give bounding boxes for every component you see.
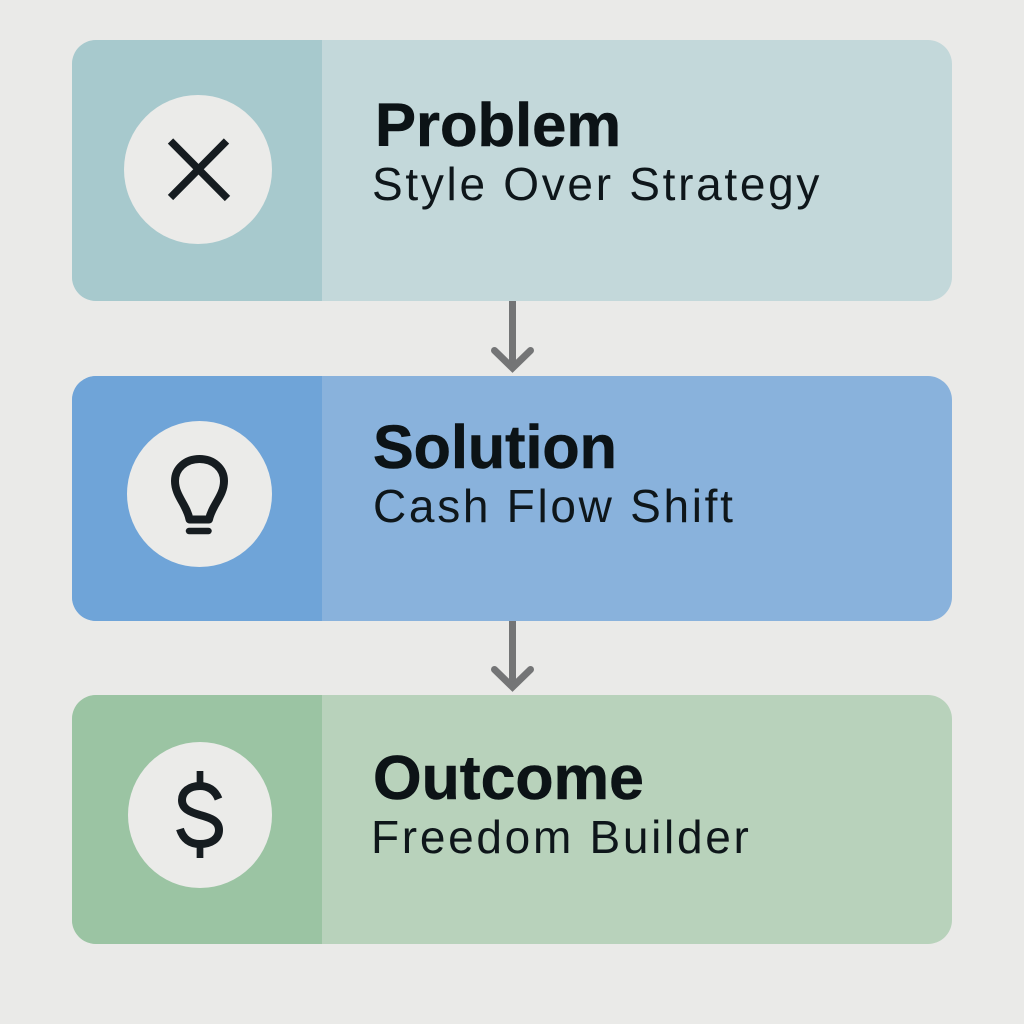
heading: solution: Solution [373,413,617,481]
text: outcome subtitle: Freedom Builder [371,811,752,863]
arrow: problem to solution [491,301,534,373]
heading: outcome: Outcome [373,743,644,813]
problem icon column [72,40,322,301]
arrow: solution to outcome [491,621,534,692]
text: problem subtitle: Style Over Strategy [372,158,822,210]
panel: solution [72,376,952,621]
icon: dollar sign in circle [128,742,272,888]
icon: light bulb in circle [127,421,272,567]
solution icon column [72,376,322,621]
text: solution subtitle: Cash Flow Shift [373,480,736,532]
icon: x mark in circle [124,95,272,244]
panel: outcome [72,695,952,944]
heading: problem: Problem [375,91,621,160]
outcome icon column [72,695,322,944]
panel: problem [72,40,952,301]
